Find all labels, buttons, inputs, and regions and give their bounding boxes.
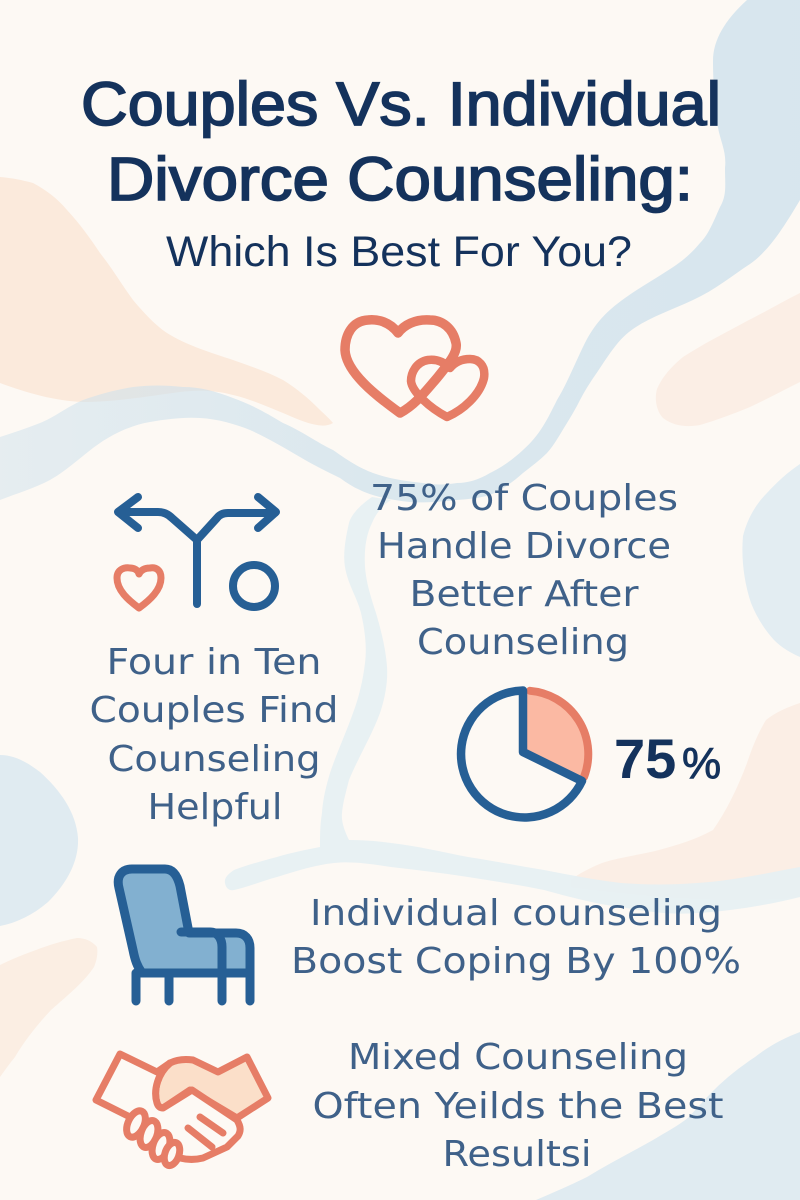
icon: crossroads with heart and circle <box>117 497 276 608</box>
pie chart: 75% <box>461 690 588 817</box>
text: individual counseling: Individual counseling <box>310 893 722 934</box>
title: Couples Vs. Individual <box>81 70 721 138</box>
text: mixed counseling: Mixed Counseling <box>348 1037 688 1078</box>
icon: armchair <box>118 869 250 1001</box>
text: 75% of couples: Handle Divorce <box>377 526 671 567</box>
text: four in ten couples <box>90 642 338 828</box>
text: 75% of couples: Counseling <box>417 622 629 663</box>
text: mixed counseling: Often Yeilds the Best <box>312 1086 724 1127</box>
text: 75% of couples <box>370 478 678 663</box>
title: Divorce Counseling: <box>107 145 693 213</box>
text: 75% of couples: Better After <box>410 574 639 615</box>
icon: handshake <box>96 1054 268 1168</box>
text: individual counseling: Boost Coping By 100% <box>291 941 741 982</box>
text: mixed counseling <box>312 1037 724 1175</box>
stat: 75%: % <box>682 739 721 788</box>
text: four in ten couples: Couples Find <box>90 690 338 731</box>
text: four in ten couples: Helpful <box>148 787 282 828</box>
text: 75% of couples: 75% of Couples <box>370 478 678 519</box>
text: individual counseling <box>291 893 741 982</box>
stat: 75%: 75 <box>614 727 676 790</box>
text: four in ten couples: Four in Ten <box>106 642 322 683</box>
text: four in ten couples: Counseling <box>108 739 320 780</box>
text: mixed counseling: Resultsi <box>442 1134 592 1175</box>
icon: two linked hearts <box>345 320 484 417</box>
stat: 75% <box>614 727 721 790</box>
title <box>81 70 721 213</box>
subtitle: Which Is Best For You? <box>166 228 632 276</box>
